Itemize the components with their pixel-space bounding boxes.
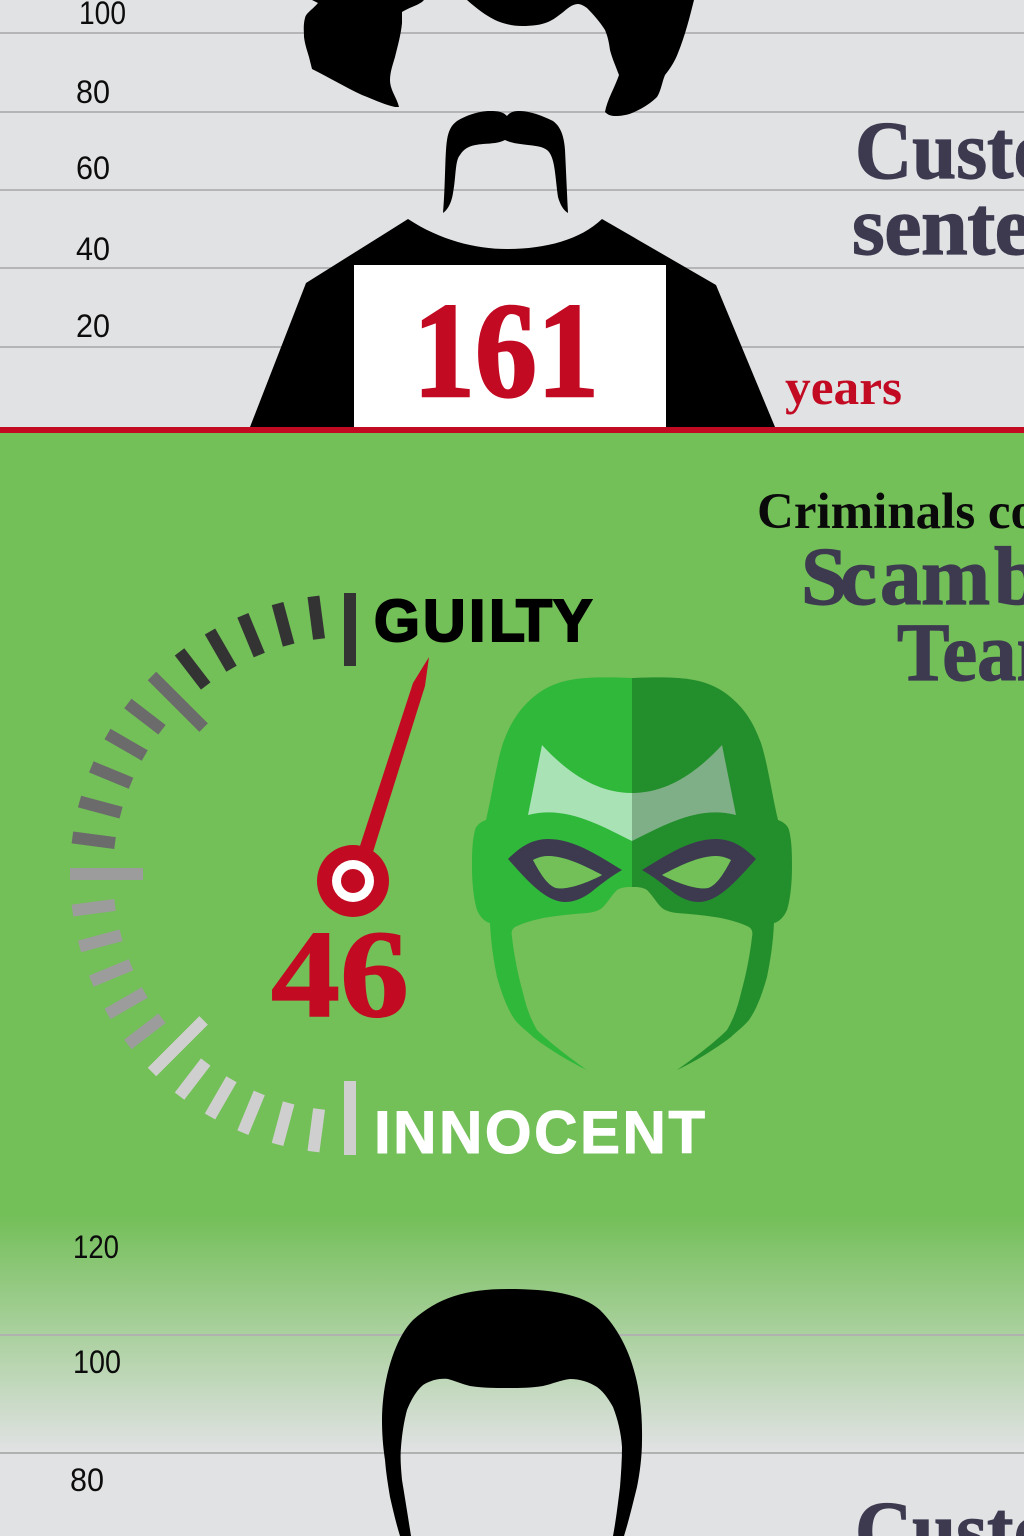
height scale labels: top chart: 60	[76, 150, 110, 186]
gauge label: innocent: INNOCENT	[374, 1099, 705, 1166]
height scale labels: top chart	[76, 0, 126, 344]
panel: green gauge section	[0, 433, 1024, 1215]
unit label: years: years	[785, 359, 902, 415]
height scale labels: top chart: 40	[76, 231, 110, 267]
gauge needle	[317, 657, 429, 917]
height scale labels: top chart: 20	[76, 308, 110, 344]
panel: top height chart background	[0, 0, 1024, 427]
gauge value: 46	[271, 906, 409, 1044]
heading: custodial sentence	[852, 104, 1024, 273]
height scale labels: lower chart: 120	[73, 1229, 119, 1265]
icon: figure hair silhouette	[382, 1289, 642, 1536]
height scale labels: lower chart	[70, 1229, 121, 1498]
gauge ticks	[70, 593, 356, 1155]
heading: scam team	[801, 530, 1024, 698]
panel: lower height chart background	[0, 1215, 1024, 1453]
height scale labels: top chart: 80	[76, 74, 110, 110]
icon: green superhero mask	[472, 677, 792, 1070]
prisoner number placard	[354, 265, 666, 427]
prisoner number placard: 161	[413, 276, 599, 426]
height scale labels: lower chart: 80	[70, 1462, 104, 1498]
icon: mugshot figure with moustache	[250, 0, 775, 427]
gauge label: guilty: GUILTY	[374, 588, 592, 654]
divider: red band	[0, 427, 1024, 433]
height scale labels: lower chart: 100	[73, 1344, 121, 1380]
